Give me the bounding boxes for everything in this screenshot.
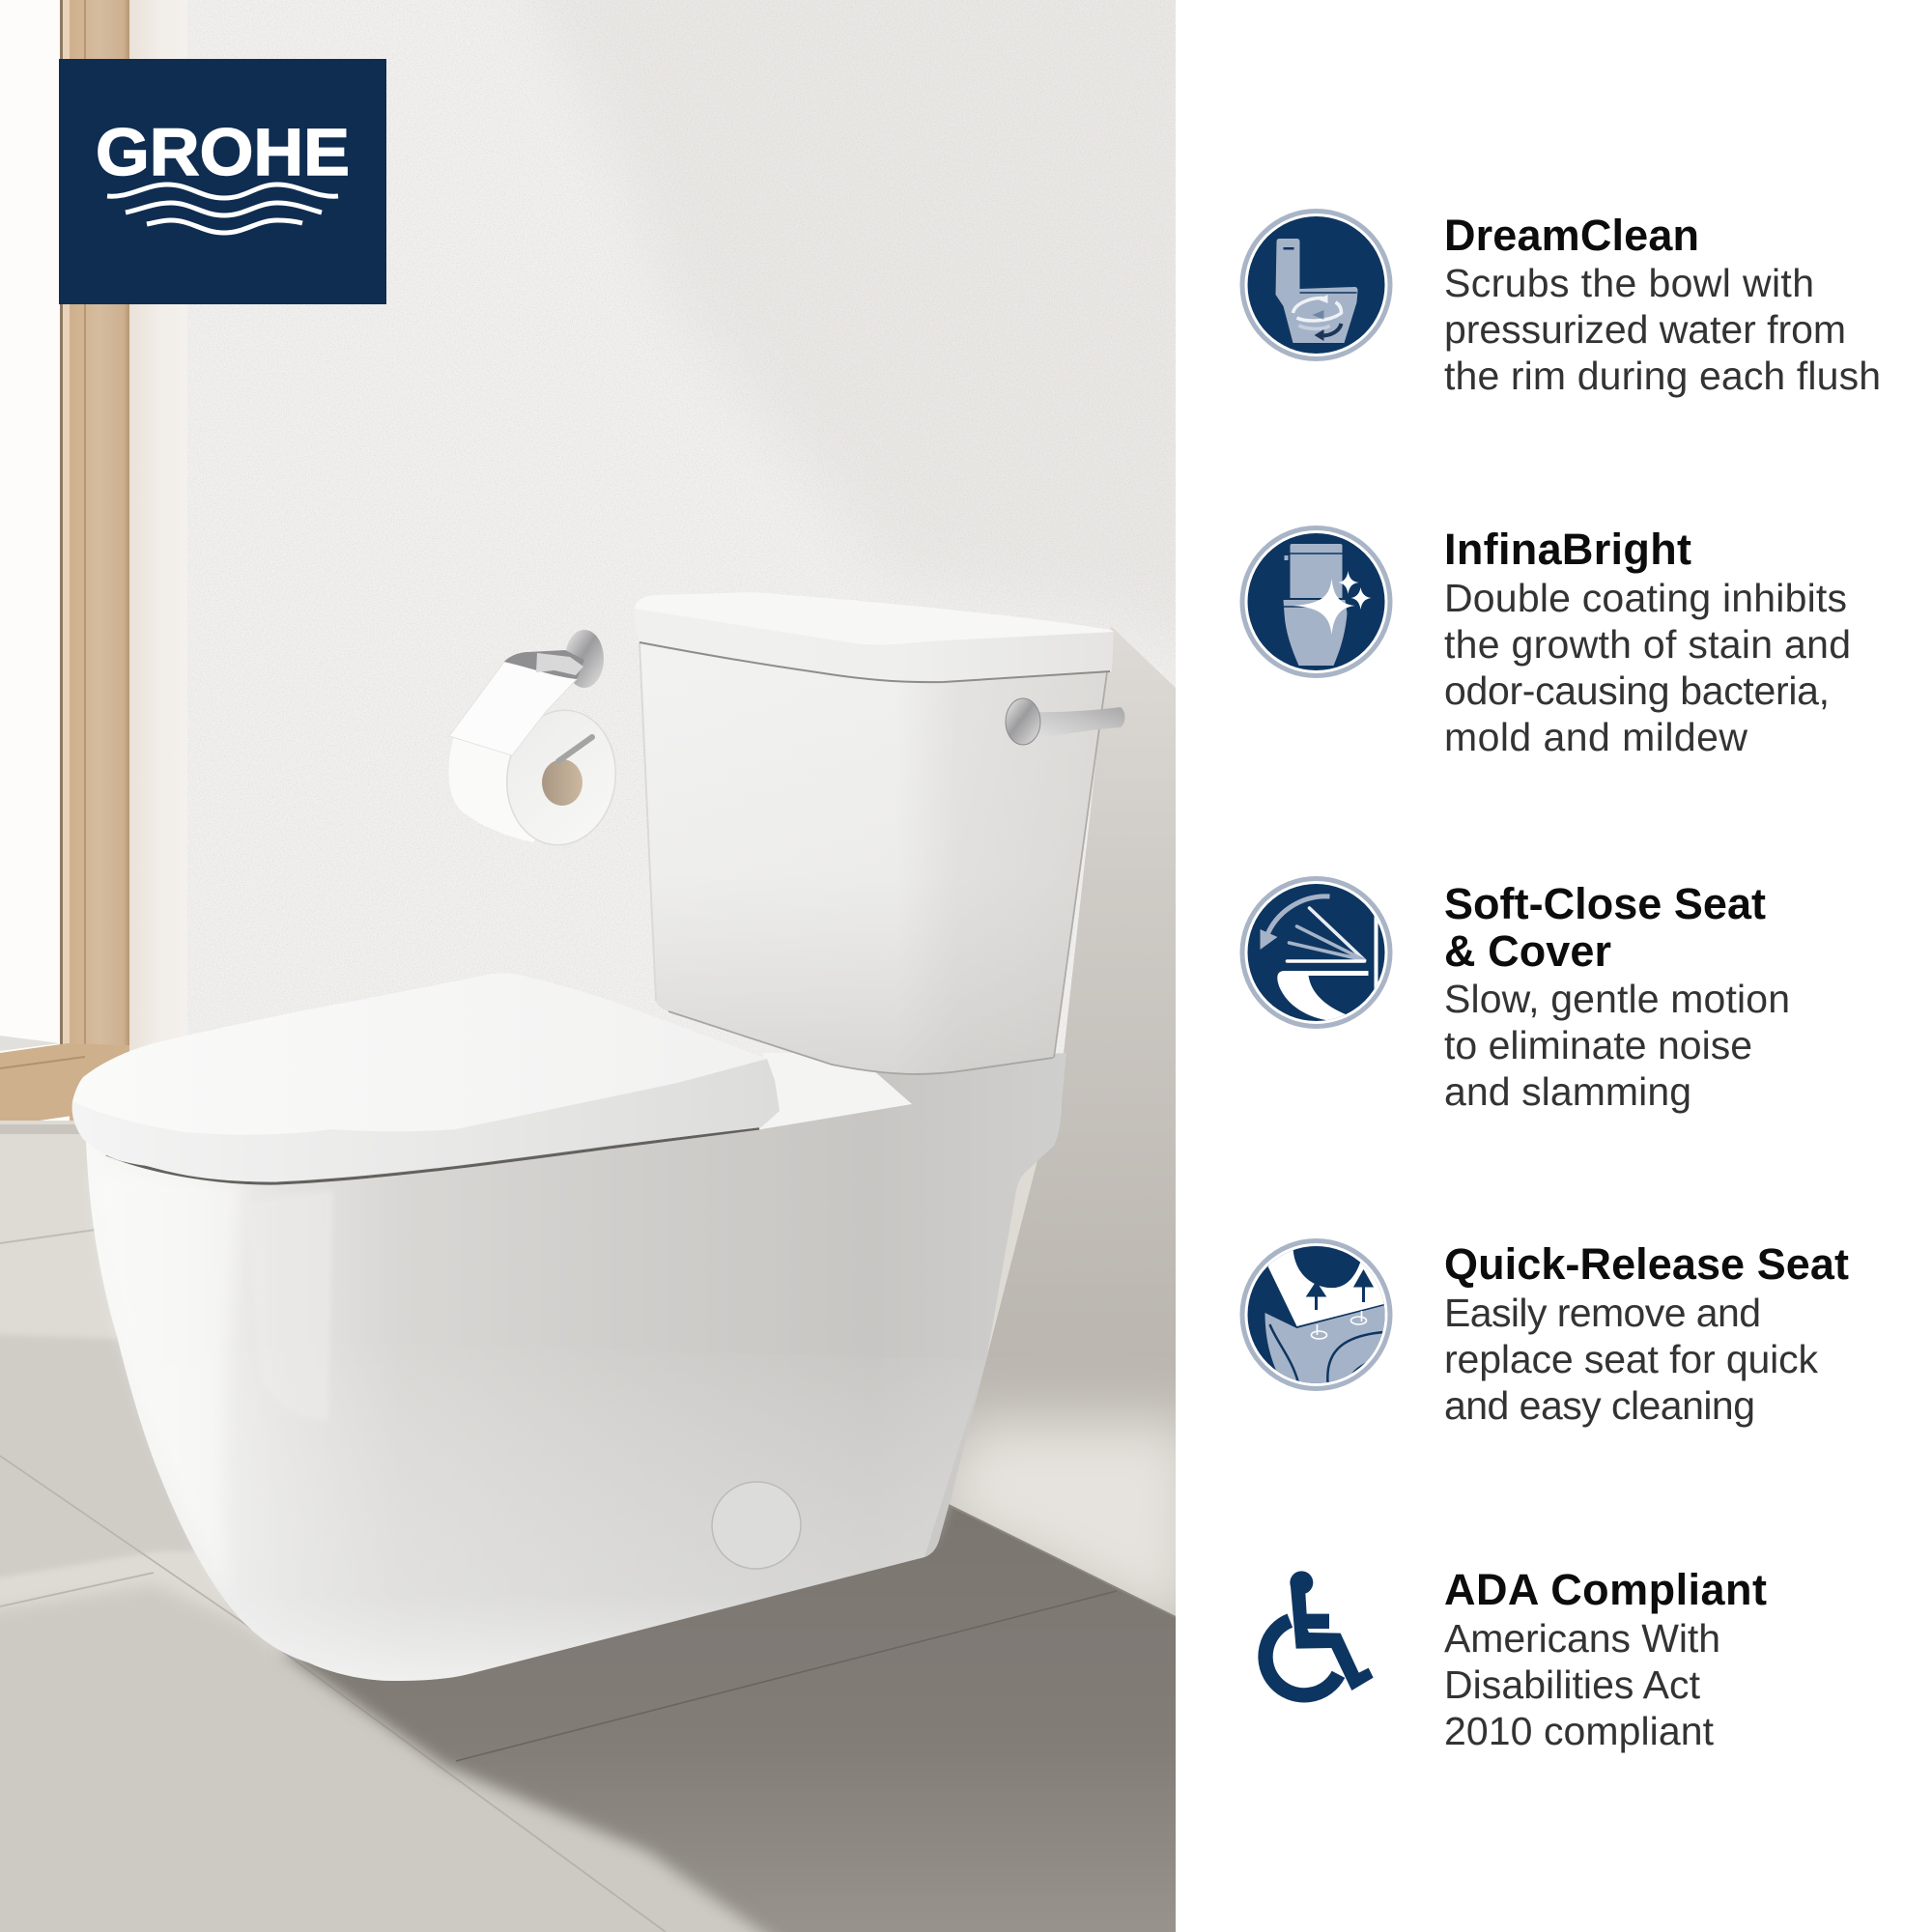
seat positions [1287, 908, 1364, 961]
seat glyph [1265, 1237, 1385, 1392]
icon: InfinaBright [1242, 527, 1390, 676]
seat glyph [1260, 896, 1378, 1022]
heading and text: Quick-Release Seat: replace seat for quick [1444, 1337, 1818, 1381]
heading and text: InfinaBright: mold and mildew [1444, 715, 1747, 759]
heading and text: InfinaBright [1444, 525, 1851, 759]
heading and text: InfinaBright: InfinaBright [1444, 525, 1691, 574]
heading and text: ADA Compliant: 2010 compliant [1444, 1709, 1715, 1753]
heading and text: Quick-Release Seat: Easily remove and [1444, 1291, 1761, 1335]
toilet paper holder [449, 630, 624, 852]
heading and text: Soft-Close Seat: & Cover [1444, 926, 1611, 976]
swirl arrows [1293, 298, 1341, 328]
toilet glyph [1275, 239, 1358, 343]
icon: DreamClean [1242, 211, 1390, 359]
lift arrows [1308, 1284, 1323, 1310]
heading and text: Soft-Close Seat: Slow, gentle motion [1444, 977, 1790, 1021]
icon: ADA wheelchair [1265, 1571, 1374, 1695]
logo wordmark: GROHE [96, 115, 350, 189]
chrome flap [504, 650, 584, 679]
tank left edge [639, 642, 656, 1001]
bright wall patch near floor [949, 1394, 1176, 1616]
floor shadow [280, 1488, 1236, 1932]
toilet glyph [1283, 544, 1347, 666]
heading and text: Soft-Close Seat: to eliminate noise [1444, 1023, 1752, 1067]
heading and text: InfinaBright: odor-causing bacteria, [1444, 668, 1830, 713]
heading and text: Soft-Close Seat: Soft-Close Seat [1444, 879, 1766, 928]
flush lever [1032, 707, 1124, 740]
wall plate [565, 630, 604, 688]
tank lid front [635, 607, 1114, 682]
heading and text: InfinaBright: Double coating inhibits [1444, 576, 1847, 620]
heading and text: Quick-Release Seat [1444, 1239, 1849, 1428]
heading and text: Quick-Release Seat: and easy cleaning [1444, 1383, 1755, 1428]
spindle [558, 737, 592, 761]
mounting pins [1312, 1311, 1366, 1339]
heading and text: Soft-Close Seat [1444, 879, 1790, 1114]
heading and text: DreamClean: the rim during each flush [1444, 354, 1881, 398]
bowl rear wedge behind seat [757, 1053, 918, 1132]
panel: bathroom photo [0, 0, 1236, 1932]
seat lid top [72, 973, 767, 1135]
white seat [1267, 1237, 1383, 1326]
toilet rim [1265, 1305, 1385, 1392]
heading and text: ADA Compliant [1444, 1565, 1767, 1753]
icon: Quick-Release Seat [1242, 1237, 1390, 1392]
heading and text: Soft-Close Seat: and slamming [1444, 1069, 1691, 1114]
seat rim [72, 1059, 780, 1181]
wall [187, 0, 1176, 1057]
heading and text: DreamClean: DreamClean [1444, 211, 1699, 260]
icon: Soft-Close Seat [1242, 879, 1390, 1026]
heading and text: DreamClean [1444, 211, 1881, 398]
toilet seat [72, 973, 780, 1183]
lower reflection [243, 1444, 955, 1681]
side reflection [325, 1206, 327, 1329]
toilet tank [635, 592, 1124, 1074]
bowl outline [1277, 971, 1368, 1022]
icon ring [1242, 527, 1390, 676]
toilet body [86, 1053, 1066, 1681]
lever plate [1006, 698, 1040, 745]
left gloss [219, 1194, 229, 1283]
heading and text: Quick-Release Seat: Quick-Release Seat [1444, 1239, 1849, 1289]
heading and text: ADA Compliant: Americans With [1444, 1616, 1720, 1661]
roll core [542, 759, 582, 806]
sparkles [1293, 571, 1372, 635]
heading and text: DreamClean: Scrubs the bowl with [1444, 261, 1814, 305]
heading and text: InfinaBright: the growth of stain and [1444, 622, 1851, 667]
lid seam [639, 642, 1110, 682]
heading and text: ADA Compliant: ADA Compliant [1444, 1565, 1767, 1614]
icon ring [1242, 211, 1390, 359]
window pane and frame [0, 0, 187, 1140]
heading and text: DreamClean: pressurized water from [1444, 307, 1846, 352]
seat opening [1293, 1245, 1364, 1288]
tank lid top [635, 592, 1114, 644]
side wall in shadow [949, 626, 1176, 1617]
heading and text: ADA Compliant: Disabilities Act [1444, 1662, 1701, 1707]
floor tile seam in shadow [456, 1591, 1117, 1761]
tank lower seam [668, 1011, 1053, 1074]
paper roll face [506, 709, 616, 846]
paper roll side [448, 738, 535, 842]
icon ring [1242, 879, 1390, 1026]
logo waves [107, 185, 338, 233]
paper cover [449, 662, 577, 755]
wall base edge [949, 1505, 1176, 1617]
motion arrow [1265, 896, 1329, 938]
logo: GROHE [59, 59, 386, 304]
icon ring [1242, 1240, 1390, 1389]
drain cover [711, 1481, 802, 1570]
tank right seam [1054, 672, 1107, 1058]
seat gap shadow [106, 1128, 759, 1183]
floor [0, 1121, 1037, 1932]
